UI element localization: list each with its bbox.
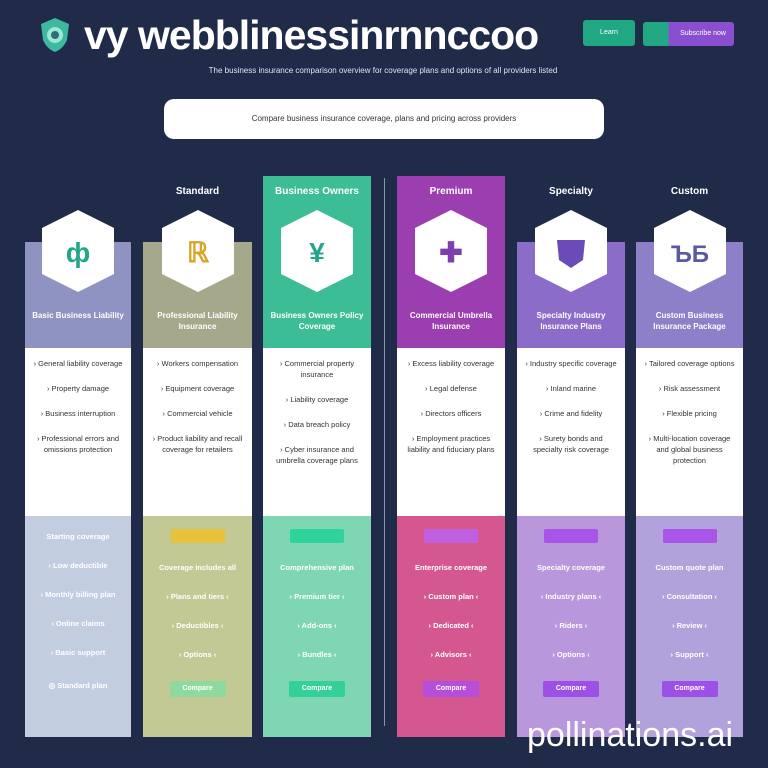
panel: column 5: › Crime and fidelity (540, 409, 602, 418)
panel: column 4: › Excess liability coverage (408, 359, 494, 368)
panel: column 6: Custom Business Insurance Package (653, 311, 726, 331)
panel: column 6: › Multi-location coverage and global business protection (649, 434, 730, 465)
panel: column 1: › Low deductible (48, 561, 108, 570)
panel: column 3: › Liability coverage (286, 395, 348, 404)
panel: column 2: › Plans and tiers ‹ (166, 592, 229, 601)
panel: column 2 (143, 186, 252, 737)
panel: column 3: Business Owners Policy Coverage (271, 311, 363, 331)
panel: column 3: › Cyber insurance and umbrella coverage plans (276, 445, 358, 465)
panel: column 5: › Industry plans ‹ (541, 592, 601, 601)
panel: column 2: Professional Liability Insurance (157, 311, 238, 331)
panel: column 4: Compare (436, 685, 466, 692)
button: green (583, 20, 635, 46)
panel: column 6: › Consultation ‹ (662, 592, 717, 601)
panel: column 3: › Bundles ‹ (298, 650, 336, 659)
panel: column 4: › Employment practices liability and fiduciary plans (407, 434, 495, 454)
panel: column 3: Business Owners (275, 186, 359, 197)
divider (384, 178, 385, 726)
panel: column 5: › Riders ‹ (555, 621, 587, 630)
panel: column 4: Commercial Umbrella Insurance (410, 311, 492, 331)
icon: hexagon 2 (162, 210, 234, 292)
icon: hexagon 5 (535, 210, 607, 292)
title: vy webblinessinrnnccoo (84, 12, 538, 58)
panel: column 4: Premium (430, 186, 472, 197)
panel: column 5: Specialty (549, 186, 593, 197)
panel: column 2: Coverage includes all (159, 563, 236, 572)
panel: column 3: › Add-ons ‹ (297, 621, 337, 630)
panel: column 6: › Tailored coverage options (645, 359, 734, 368)
panel: column 2: › Deductibles ‹ (172, 621, 223, 630)
icon: hexagon 4: ✚ (439, 237, 463, 268)
panel: column 2: › Equipment coverage (161, 384, 234, 393)
panel: column 3: › Commercial property insurance (280, 359, 354, 379)
panel: column 2: Compare (182, 685, 213, 692)
panel: column 4 (397, 176, 505, 737)
panel: column 2: › Options ‹ (179, 650, 216, 659)
panel: column 1 (25, 210, 131, 737)
icon: hexagon 1: ф (66, 237, 90, 268)
panel: column 1: ◎ Standard plan (49, 681, 107, 690)
panel: column 3 (263, 176, 371, 737)
panel: column 6: › Risk assessment (659, 384, 720, 393)
panel: column 1: › Online claims (51, 619, 105, 628)
panel: column 6: Compare (674, 685, 705, 692)
panel: column 6: › Review ‹ (672, 621, 707, 630)
logo icon (41, 18, 69, 52)
panel: column 2: Standard (176, 186, 219, 197)
button: green: Learn (600, 29, 618, 36)
icon: hexagon 6: ЪБ (670, 241, 709, 268)
panel: column 3: › Data breach policy (284, 420, 350, 429)
icon: hexagon 6 (654, 210, 726, 292)
icon: hexagon 3: ¥ (309, 237, 325, 268)
panel: column 5: › Options ‹ (552, 650, 590, 659)
icon: hexagon 3 (281, 210, 353, 292)
panel: column 5: › Industry specific coverage (525, 359, 617, 368)
panel: column 2: › Product liability and recall coverage for retailers (153, 434, 242, 454)
panel: column 3: Comprehensive plan (280, 563, 354, 572)
subtitle: The business insurance comparison overview for coverage plans and options of all providers listed (209, 66, 557, 75)
panel: column 4: › Directors officers (421, 409, 481, 418)
panel: column 1: Starting coverage (46, 532, 110, 541)
button: green-purple: Subscribe now (680, 30, 726, 37)
panel: column 1: › General liability coverage (34, 359, 122, 368)
button: green-purple (643, 22, 734, 46)
panel: column 2: › Workers compensation (157, 359, 238, 368)
panel: column 6: › Support ‹ (671, 650, 708, 659)
panel: column 5: › Surety bonds and specialty risk coverage (533, 434, 609, 454)
panel: column 4: › Legal defense (425, 384, 477, 393)
panel: column 5: Specialty Industry Insurance Plans (537, 311, 605, 331)
panel: column 5: Specialty coverage (537, 563, 605, 572)
panel: column 5: Compare (556, 685, 586, 692)
panel: column 1: Basic Business Liability (32, 311, 124, 320)
panel: column 1: › Property damage (47, 384, 109, 393)
search bar (164, 99, 604, 139)
panel: column 6: › Flexible pricing (662, 409, 717, 418)
search bar: Compare business insurance coverage, plans and pricing across providers (252, 114, 516, 123)
icon: hexagon 2: ℝ (186, 237, 209, 268)
panel: column 5: › Inland marine (546, 384, 596, 393)
panel: column 6 (636, 186, 743, 737)
icon: hexagon 4 (415, 210, 487, 292)
panel: column 1: › Professional errors and omissions protection (37, 434, 119, 454)
panel: column 6: Custom (671, 186, 708, 197)
panel: column 4: › Advisors ‹ (430, 650, 471, 659)
icon: hexagon 1 (42, 210, 114, 292)
panel: column 4: › Dedicated ‹ (428, 621, 474, 630)
panel: column 2: › Commercial vehicle (162, 409, 233, 418)
panel: column 1: › Basic support (51, 648, 105, 657)
panel: column 4: Enterprise coverage (415, 563, 487, 572)
panel: column 1: › Monthly billing plan (40, 590, 116, 599)
panel: column 5 (517, 186, 625, 737)
panel: column 3: › Premium tier ‹ (289, 592, 344, 601)
watermark: pollinations.ai (527, 716, 733, 754)
panel: column 4: › Custom plan ‹ (424, 592, 478, 601)
panel: column 3: Compare (302, 685, 332, 692)
panel: column 6: Custom quote plan (656, 563, 723, 572)
panel: column 1: › Business interruption (41, 409, 115, 418)
